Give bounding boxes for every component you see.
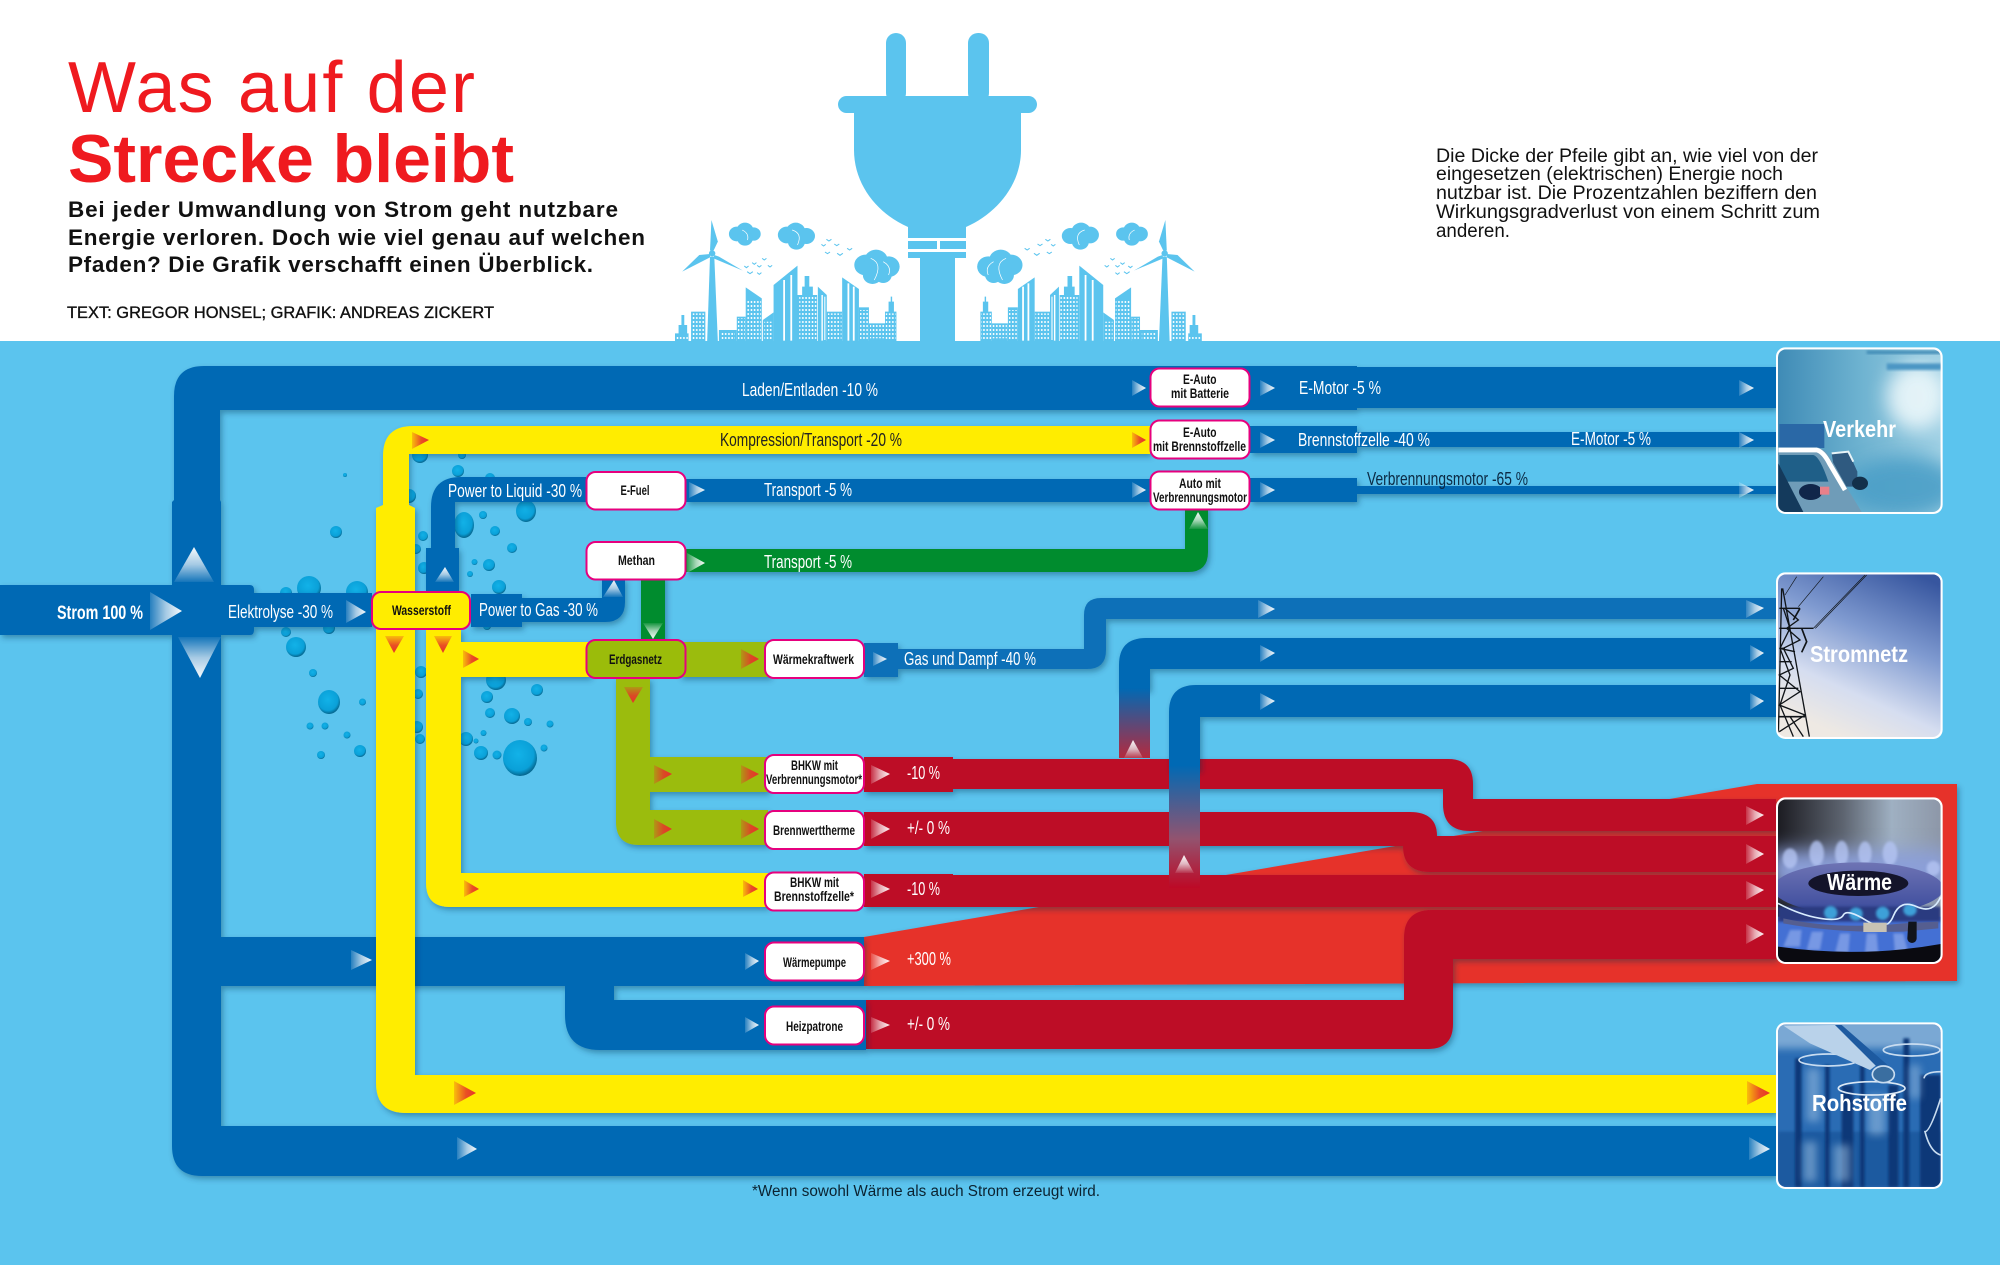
band: Stromnetz row 2 fade — [1119, 688, 1150, 758]
card: Rohstoffe — [1770, 1018, 1950, 1189]
arrows: red down-pointing — [385, 636, 643, 703]
label: E-Motor row 2: E-Motor -5 % — [1571, 429, 1651, 449]
label: Heizpatrone loss: +/- 0 % — [907, 1014, 950, 1034]
explanation text: nutzbar ist. Die Prozentzahlen beziffern den — [1436, 183, 1817, 204]
band: Stromnetz row 3 fade — [1169, 766, 1200, 888]
node: E-Auto mit Brennstoffzelle: E-Auto — [1183, 425, 1216, 440]
icon: plug with skyline — [675, 33, 1202, 342]
band: olive Erdgasnetz horizontal — [680, 642, 770, 677]
label: Kompression/Transport: Kompression/Transport -20 % — [720, 430, 902, 450]
node: Waermekraftwerk: Wärmekraftwerk — [773, 652, 854, 667]
intro text: Energie verloren. Doch wie viel genau auf welchen — [68, 225, 645, 250]
card title: Rohstoffe: Rohstoffe — [1812, 1090, 1907, 1116]
band: heat pump gain (light red) — [864, 784, 1957, 986]
band: Stromnetz row 2 — [1119, 638, 1776, 690]
band: main blue trunk with Strom input, Waermepumpe and Heizpatrone — [0, 366, 1776, 1176]
node: Wasserstoff — [372, 592, 470, 629]
explanation text: Wirkungsgradverlust von einem Schritt zum — [1436, 202, 1820, 223]
node: Brennwerttherme: Brennwerttherme — [773, 823, 855, 838]
label: Brennwerttherme loss: +/- 0 % — [907, 818, 950, 838]
nodes — [372, 368, 1250, 1044]
explanation text: Die Dicke der Pfeile gibt an, wie viel von der — [1436, 146, 1819, 167]
band: heat row 3 — [864, 874, 1776, 907]
skyline left — [675, 220, 900, 341]
node: Wasserstoff: Wasserstoff — [392, 603, 451, 618]
node: E-Fuel — [586, 472, 686, 510]
band: after Verbrennungsmotor car — [1250, 478, 1776, 502]
arrows: red right-pointing — [412, 432, 1770, 1105]
card: Verkehr — [1776, 347, 1943, 514]
title: Was auf der — [68, 48, 475, 128]
node: E-Auto mit Batterie: E-Auto — [1183, 372, 1216, 387]
node: Auto mit Verbrennungsmotor — [1150, 472, 1250, 510]
node: Erdgasnetz: Erdgasnetz — [609, 652, 662, 667]
node: Methan — [586, 542, 686, 580]
label: Strom 100 %: Strom 100 % — [57, 603, 143, 624]
label: Transport E-Fuel: Transport -5 % — [764, 480, 852, 500]
band: olive Erdgasnetz vertical — [616, 678, 768, 845]
band: Gas und Dampf to Stromnetz — [864, 598, 1776, 677]
card: Waerme — [1770, 797, 1950, 964]
node: BHKW mit Verbrennungsmotor — [765, 755, 864, 793]
label: Elektrolyse: Elektrolyse -30 % — [228, 602, 333, 622]
label: E-Motor row 1: E-Motor -5 % — [1299, 378, 1381, 398]
node: BHKW mit Verbrennungsmotor: Verbrennungsmotor* — [766, 772, 863, 787]
label: BHKW Brennstoffzelle loss: -10 % — [907, 879, 940, 899]
label: Transport Methan: Transport -5 % — [764, 552, 852, 572]
band: yellow Wasserstoff second — [426, 629, 768, 907]
node: Heizpatrone: Heizpatrone — [786, 1019, 843, 1034]
arrows: white right-pointing — [150, 380, 1770, 1160]
card: Stromnetz — [1776, 572, 1943, 739]
band: yellow Wasserstoff main — [376, 426, 1776, 1113]
card title: Verkehr: Verkehr — [1823, 416, 1896, 442]
band: Power to Gas — [471, 578, 625, 627]
flow labels — [57, 378, 1651, 1034]
node: Erdgasnetz — [586, 640, 686, 678]
node: BHKW mit Brennstoffzelle: BHKW mit — [790, 875, 839, 890]
band: Stromnetz row 3 — [1169, 685, 1776, 770]
label: Gas und Dampf: Gas und Dampf -40 % — [904, 649, 1036, 669]
node: E-Auto mit Batterie — [1150, 368, 1250, 406]
label: Verbrennungsmotor: Verbrennungsmotor -65 % — [1367, 469, 1528, 489]
node: Waermepumpe — [765, 942, 864, 980]
node: Methan: Methan — [618, 553, 655, 568]
band: heat row 4 — [866, 910, 1776, 1049]
label: Laden/Entladen: Laden/Entladen -10 % — [742, 380, 878, 400]
arrows: white down-pointing — [178, 623, 663, 678]
band: Power to Liquid — [426, 477, 586, 591]
node: BHKW mit Brennstoffzelle — [765, 872, 864, 910]
label: Brennstoffzelle: Brennstoffzelle -40 % — [1298, 430, 1430, 450]
title: Strecke bleibt — [68, 121, 514, 197]
node: Auto mit Verbrennungsmotor: Auto mit — [1179, 476, 1221, 491]
explanation text — [1436, 146, 1820, 242]
node: E-Auto mit Brennstoffzelle: mit Brennstoffzelle — [1153, 439, 1246, 454]
intro text: Bei jeder Umwandlung von Strom geht nutzbare — [68, 197, 618, 222]
band: heat row 2 — [864, 812, 1776, 872]
card title: Stromnetz: Stromnetz — [1810, 641, 1908, 667]
water bubbles — [280, 447, 554, 776]
label: BHKW Verbrennungsmotor loss: -10 % — [907, 763, 940, 783]
band: green Methan to Erdgasnetz — [641, 575, 665, 643]
node: BHKW mit Verbrennungsmotor: BHKW mit — [791, 758, 838, 773]
footnote: *Wenn sowohl Wärme als auch Strom erzeugt wird. — [752, 1183, 1100, 1200]
node: Auto mit Verbrennungsmotor: Verbrennungsmotor — [1153, 490, 1248, 505]
skyline right — [977, 220, 1202, 341]
band: after Brennstoffzelle car — [1250, 426, 1776, 453]
node: Brennwerttherme — [765, 811, 864, 849]
band: E-Fuel transport — [686, 479, 1150, 502]
node: E-Fuel: E-Fuel — [620, 483, 650, 498]
diagram background — [0, 341, 2000, 1265]
label: Power to Gas: Power to Gas -30 % — [479, 600, 598, 620]
node: Waermekraftwerk — [765, 640, 864, 678]
arrows: white up-pointing — [174, 512, 1208, 873]
explanation text: eingesetzen (elektrischen) Energie noch — [1436, 164, 1783, 185]
icon: plug — [838, 33, 1037, 342]
intro text: Pfaden? Die Grafik verschafft einen Überblick. — [68, 252, 593, 277]
card title: Waerme: Wärme — [1827, 869, 1892, 895]
title — [68, 48, 514, 197]
label: Waermepumpe gain: +300 % — [907, 949, 951, 969]
node: Waermepumpe: Wärmepumpe — [783, 955, 846, 970]
band: green Methan transport — [686, 505, 1208, 572]
header background — [0, 0, 2000, 341]
intro text — [68, 197, 645, 277]
node: E-Auto mit Brennstoffzelle — [1150, 420, 1250, 458]
label: Power to Liquid: Power to Liquid -30 % — [448, 481, 582, 501]
node: BHKW mit Brennstoffzelle: Brennstoffzelle* — [774, 889, 855, 904]
node: E-Auto mit Batterie: mit Batterie — [1171, 386, 1229, 401]
credits: TEXT: GREGOR HONSEL; GRAFIK: ANDREAS ZICKERT — [67, 304, 494, 322]
node: Heizpatrone — [765, 1006, 864, 1044]
band: heat row 1 — [864, 757, 1776, 831]
explanation text: anderen. — [1436, 221, 1510, 242]
